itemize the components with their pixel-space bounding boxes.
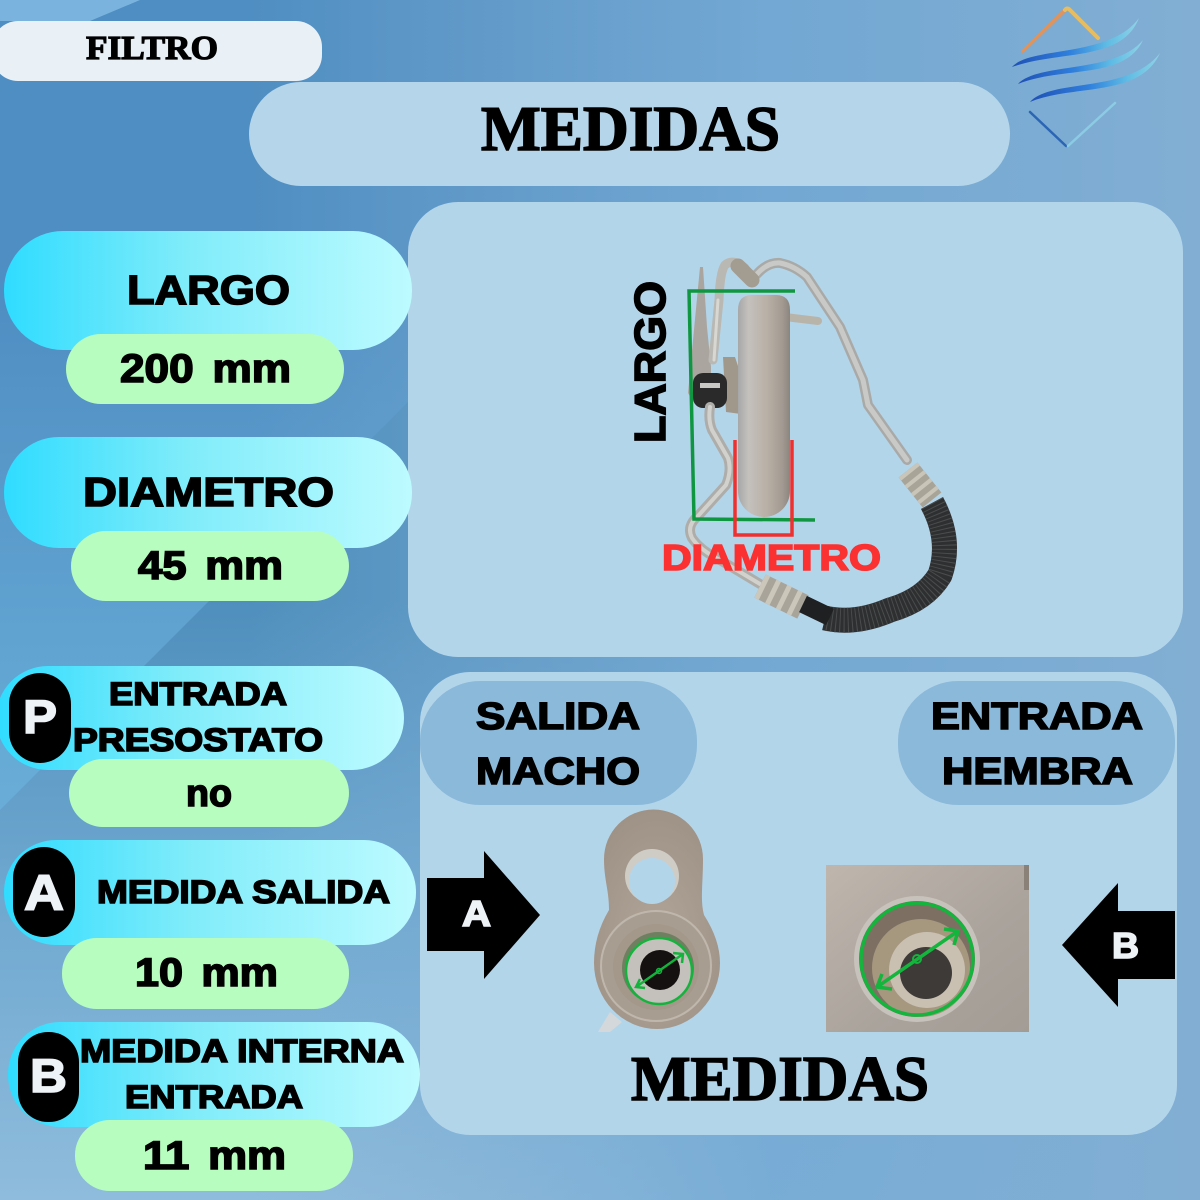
badge P: P [23, 690, 57, 743]
spec: largo: LARGO [127, 267, 290, 313]
pill: entrada hembra: HEMBRA [942, 751, 1133, 793]
arrow A [427, 851, 540, 979]
arrow B [1062, 883, 1175, 1007]
panel: connectors [420, 672, 1177, 1135]
heading: medidas: MEDIDAS [631, 1044, 929, 1114]
pill: salida macho: MACHO [476, 751, 640, 793]
spec: medida salida: MEDIDA SALIDA [97, 874, 390, 910]
value: 11 mm: 11 mm [143, 1134, 286, 1178]
filter photo [688, 262, 944, 620]
spec: medida salida [4, 840, 416, 1009]
pill: entrada hembra [898, 681, 1175, 805]
value: 200 mm: 200 mm [120, 347, 291, 391]
title: MEDIDAS [481, 94, 780, 164]
spec: medida interna entrada: MEDIDA INTERNA [80, 1033, 404, 1069]
value: 10 mm: 10 mm [135, 951, 278, 995]
spec: entrada presostato [0, 666, 404, 827]
red diameter bracket [735, 440, 792, 535]
photo: male outlet [594, 809, 720, 1032]
label: largo: LARGO [626, 281, 675, 443]
value: no [69, 759, 349, 827]
pill: salida macho [420, 681, 697, 805]
spec: diametro [4, 437, 412, 601]
value: no: no [186, 773, 232, 815]
badge A [13, 847, 75, 937]
value: 45 mm: 45 mm [138, 544, 283, 588]
label pill: filtro [0, 21, 322, 81]
label: diametro: DIAMETRO [662, 537, 881, 578]
badge B: B [30, 1049, 67, 1102]
panel: filter photo [408, 202, 1183, 657]
badge B [18, 1032, 79, 1122]
pill: salida macho: SALIDA [476, 696, 640, 738]
badge A: A [24, 865, 64, 921]
value: 200 mm [66, 334, 344, 404]
spec: medida interna entrada: ENTRADA [125, 1079, 303, 1115]
spec: largo [4, 231, 412, 404]
arrow B: B [1112, 925, 1139, 966]
spec: medida interna entrada [8, 1022, 420, 1191]
label text: filtro: FILTRO [86, 30, 218, 67]
spec: entrada presostato: PRESOSTATO [73, 722, 323, 758]
value: 10 mm [62, 938, 349, 1009]
badge P [9, 673, 71, 763]
arrow A: A [462, 893, 491, 934]
green largo lines [689, 291, 815, 520]
spec: diametro: DIAMETRO [83, 469, 334, 515]
title pill: medidas [249, 82, 1010, 186]
photo: female inlet [826, 865, 1029, 1032]
value: 45 mm [71, 531, 349, 601]
pill: entrada hembra: ENTRADA [931, 696, 1143, 738]
value: 11 mm [75, 1120, 353, 1191]
logo [1012, 8, 1160, 146]
spec: entrada presostato: ENTRADA [109, 676, 287, 712]
